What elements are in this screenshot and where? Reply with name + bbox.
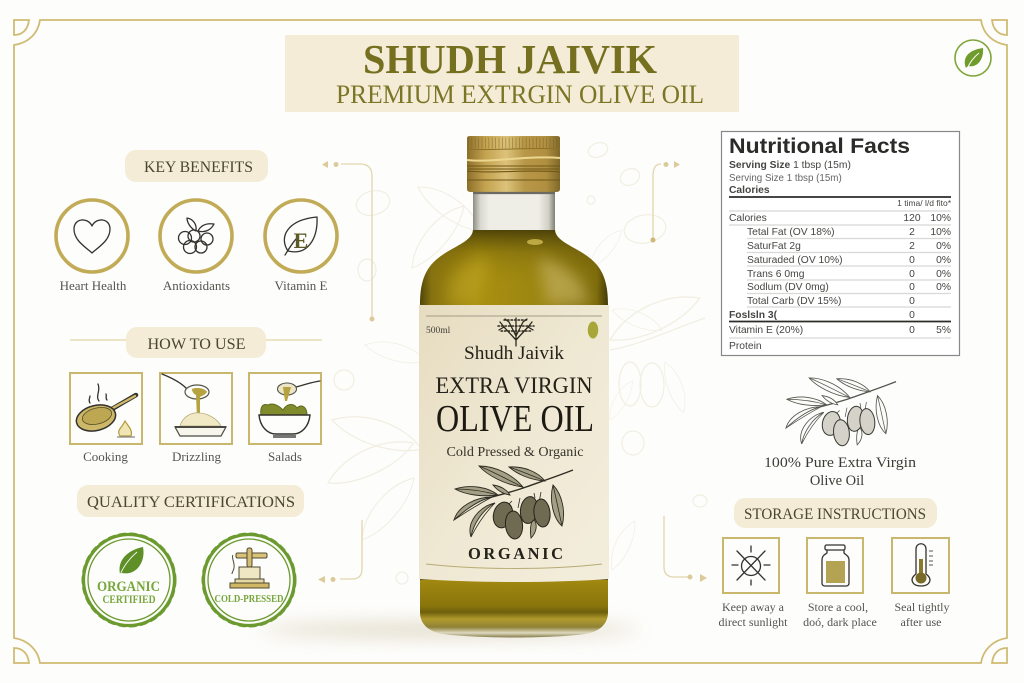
heading: storage instructions xyxy=(734,498,937,528)
nutrition rows: 5% xyxy=(936,325,951,336)
heading: how to use xyxy=(70,327,322,358)
bottle shadow xyxy=(260,622,640,638)
panel: storage instructions xyxy=(718,498,950,629)
background olive leaf illustration xyxy=(322,140,707,584)
nutrition rows: 0 xyxy=(909,310,915,321)
text: 100% pure extra virgin olive oil xyxy=(764,455,917,489)
nutrition rows: Calories xyxy=(729,213,767,224)
header banner xyxy=(285,35,739,112)
badge: cold-pressed xyxy=(202,534,296,626)
nutrition rows: 2 xyxy=(909,227,915,238)
heading: how to use: HOW TO USE xyxy=(148,336,246,353)
nutrition rows: Saturaded (OV 10%) xyxy=(747,255,843,266)
label: keep away sunlight line 2: direct sunlight xyxy=(718,615,788,629)
heading: quality certifications: QUALITY CERTIFICATIONS xyxy=(87,494,295,511)
label: store cool line 2: doó, dark place xyxy=(803,615,877,629)
nutrition rows: 0% xyxy=(936,255,951,266)
nutrition rows: 0 xyxy=(909,255,915,266)
nutrition rows: Serving Size 1 tbsp (15m) xyxy=(729,173,842,184)
nutrition rows: 0% xyxy=(936,269,951,280)
nutrition rows: 10% xyxy=(930,213,951,224)
badge: organic certified: ORGANIC xyxy=(97,579,160,595)
nutrition rows: 0 xyxy=(909,325,915,336)
nutrition facts table xyxy=(722,132,960,356)
panel: how to use xyxy=(70,327,322,464)
icon: antioxidants berries xyxy=(160,200,232,272)
nutrition title: Nutritional Facts xyxy=(729,135,910,158)
nutrition rows: Calories xyxy=(729,185,770,196)
nutrition rows xyxy=(729,160,952,352)
nutrition rows: Vitamin E (20%) xyxy=(729,325,803,336)
icon: vitamin E leaf xyxy=(265,200,337,272)
connector arrow: nutrition to bottle xyxy=(650,161,680,242)
bottle size: 500ml xyxy=(426,326,451,336)
label: store cool line 1: Store a cool, xyxy=(808,600,868,614)
brand name: Shudh Jaivik xyxy=(464,343,565,364)
nutrition rows: Foslsln 3( xyxy=(729,310,778,321)
icon: drizzling spoon xyxy=(160,373,232,444)
brand title: SHUDH JAIVIK xyxy=(363,36,657,82)
icon: tree logo xyxy=(498,318,534,346)
nutrition rows: Tetal Fat (OV 18%) xyxy=(747,227,835,238)
icon: salad bowl xyxy=(249,373,321,444)
nutrition rows: 1 tima/ l/d fito* xyxy=(897,198,952,208)
nutrition rows: Trans 6 0mg xyxy=(747,269,805,280)
oil body xyxy=(420,230,608,600)
heading: key benefits: KEY BENEFITS xyxy=(144,159,253,176)
connector arrow: certifications to bottle xyxy=(318,520,362,583)
organic label text: ORGANIC xyxy=(468,544,563,563)
olive oil bottle xyxy=(419,136,609,638)
panel: quality certifications xyxy=(77,485,304,626)
connector arrow: key benefits to bottle xyxy=(322,161,374,322)
badge: organic certified: CERTIFIED xyxy=(102,594,156,606)
nutrition rows: 0% xyxy=(936,241,951,252)
nutrition rows: Sodlum (DV 0mg) xyxy=(747,282,829,293)
icon: heart health xyxy=(56,200,128,272)
icon: vitamin E leaf: E xyxy=(294,228,308,253)
label: seal tightly line 2: after use xyxy=(901,615,941,629)
text: 100% pure extra virgin olive oil: Olive Oil xyxy=(810,473,864,489)
nutrition rows: Serving Size 1 tbsp (15m) xyxy=(729,160,851,171)
nutrition rows: SaturFat 2g xyxy=(747,241,801,252)
nutrition rows: 0 xyxy=(909,269,915,280)
nutrition rows: 0 xyxy=(909,296,915,307)
icon: green dot xyxy=(588,322,598,338)
badge: cold-pressed: COLD-PRESSED xyxy=(214,593,284,605)
heading: key benefits xyxy=(125,150,268,182)
nutrition rows: 120 xyxy=(903,213,921,224)
label: vitamin E: Vitamin E xyxy=(274,278,328,293)
label: keep away sunlight: Keep away a xyxy=(722,600,785,614)
label: antioxidants: Antioxidants xyxy=(163,278,230,293)
product label xyxy=(419,305,609,582)
bottle neck xyxy=(473,192,555,232)
illustration: olive branch, pure extra virgin xyxy=(786,378,896,447)
nutrition rows: 0% xyxy=(936,282,951,293)
badge: organic certified xyxy=(82,534,176,626)
icon: no sunlight xyxy=(723,538,779,593)
product name line 1: EXTRA VIRGIN xyxy=(436,373,593,398)
label: cooking: Cooking xyxy=(83,449,128,464)
heading: storage instructions: STORAGE INSTRUCTIONS xyxy=(744,506,926,523)
nutrition rows: Protein xyxy=(729,341,762,352)
glass highlights xyxy=(447,258,490,304)
tagline: Cold Pressed & Organic xyxy=(446,445,584,460)
product name line 2: OLIVE OIL xyxy=(436,398,594,440)
icon: storage jar xyxy=(807,538,863,593)
subtitle: PREMIUM EXTRGIN OLIVE OIL xyxy=(336,80,704,109)
heading: quality certifications xyxy=(77,485,304,517)
icon: thermometer xyxy=(892,538,949,593)
nutrition rows: Total Carb (DV 15%) xyxy=(747,296,841,307)
label: salads: Salads xyxy=(268,449,302,464)
nutrition rows: 2 xyxy=(909,241,915,252)
icon: organic leaf badge xyxy=(955,40,991,76)
label: heart health: Heart Health xyxy=(60,278,127,293)
icon: cooking pan xyxy=(70,373,142,444)
nutrition rows: 10% xyxy=(930,227,951,238)
text: 100% pure extra virgin olive oil: 100% Pure Extra Virgin xyxy=(764,455,917,471)
label: seal tightly line 1: Seal tightly xyxy=(894,600,950,614)
panel: key benefits xyxy=(56,150,337,293)
bottle base xyxy=(420,580,608,638)
nutrition rows: 0 xyxy=(909,282,915,293)
illustration: olive branch xyxy=(454,466,573,540)
bottle cap xyxy=(467,136,560,193)
connector arrow: storage to bottle xyxy=(664,516,707,582)
label: drizzling: Drizzling xyxy=(172,449,222,464)
